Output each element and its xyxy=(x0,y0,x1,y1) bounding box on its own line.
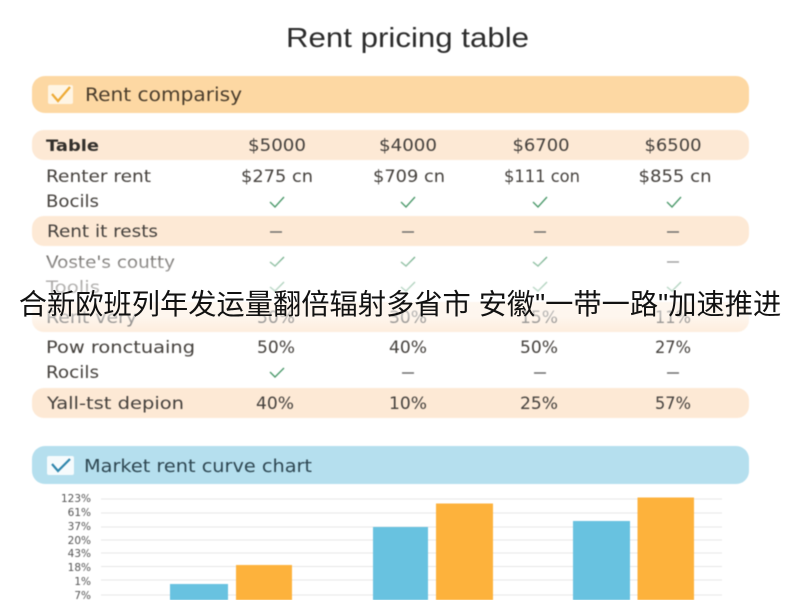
row: pow ronctuaing: 50% xyxy=(520,338,558,357)
table header row: $5000 xyxy=(248,136,306,155)
row: voste's county xyxy=(46,253,679,272)
title: Rent pricing table xyxy=(286,22,529,53)
panel: market rent chart header: Market rent curve chart xyxy=(84,456,312,477)
row: pow ronctuaing: 40% xyxy=(389,338,427,357)
row: rent it rests: Rent it rests xyxy=(47,222,158,241)
row: pow ronctuaing: 27% xyxy=(655,338,691,357)
pricing table xyxy=(32,130,749,418)
row: pow ronctuaing: Pow ronctuaing xyxy=(46,338,195,357)
row: renter rent: Renter rent xyxy=(46,167,152,186)
row: renter rent: $855 cn xyxy=(638,167,712,186)
y axis labels: 18% xyxy=(68,562,91,574)
y axis labels: 123% xyxy=(61,493,91,505)
row: toolis: Toolis xyxy=(45,278,100,297)
bars: group 3 xyxy=(573,498,694,600)
row: renter rent xyxy=(46,167,712,186)
row: yall-tst depion: Yall-tst depion xyxy=(46,394,184,413)
y axis labels: 20% xyxy=(68,535,91,547)
row: yall-tst depion: 57% xyxy=(655,394,691,413)
row: rent very xyxy=(32,302,749,332)
row: rocils: Rocils xyxy=(46,363,99,382)
row: pow ronctuaing: 50% xyxy=(257,338,295,357)
row: renter rent: $709 cn xyxy=(373,167,445,186)
table header row: $4000 xyxy=(379,136,437,155)
panel: market rent chart header xyxy=(32,446,749,484)
table header row: $6700 xyxy=(512,136,570,155)
panel: rent comparison header xyxy=(32,76,749,113)
table header row: Table xyxy=(46,136,99,155)
row: rent very: 15% xyxy=(520,308,558,327)
row: rocils xyxy=(46,363,679,382)
row: bocils: Bocils xyxy=(46,192,99,211)
table header row: $6500 xyxy=(644,136,702,155)
row: toolis xyxy=(45,278,681,297)
y axis labels xyxy=(61,493,91,600)
row: yall-tst depion: 40% xyxy=(256,394,294,413)
y axis labels: 43% xyxy=(68,548,91,560)
row: yall-tst depion: 10% xyxy=(389,394,427,413)
row: yall-tst depion: 25% xyxy=(520,394,558,413)
bar chart xyxy=(61,493,722,600)
row: rent it rests xyxy=(32,216,749,246)
y axis labels: 61% xyxy=(68,507,91,519)
row: renter rent: $111 con xyxy=(504,167,580,186)
y axis labels: 1% xyxy=(74,576,91,588)
caption overlay: 合新欧班列年发运量翻倍辐射多省市 安徽"一带一路"加速推进 xyxy=(19,288,781,320)
bars: group 1 xyxy=(170,565,292,600)
table header row xyxy=(32,130,749,160)
row: pow ronctuaing xyxy=(46,338,691,357)
row: yall-tst depion xyxy=(32,388,749,418)
panel: rent comparison header: Rent comparisy xyxy=(85,85,242,106)
bars: group 2 xyxy=(373,504,493,600)
row: rent very: 11% xyxy=(655,308,691,327)
row: rent very: 30% xyxy=(389,308,427,327)
y axis labels: 37% xyxy=(68,521,91,533)
row: voste's county: Voste's coutty xyxy=(46,253,175,272)
row: renter rent: $275 cn xyxy=(241,167,313,186)
row: bocils xyxy=(46,192,681,211)
row: rent very: Rent very xyxy=(46,308,137,327)
row: rent very: 50% xyxy=(257,308,295,327)
